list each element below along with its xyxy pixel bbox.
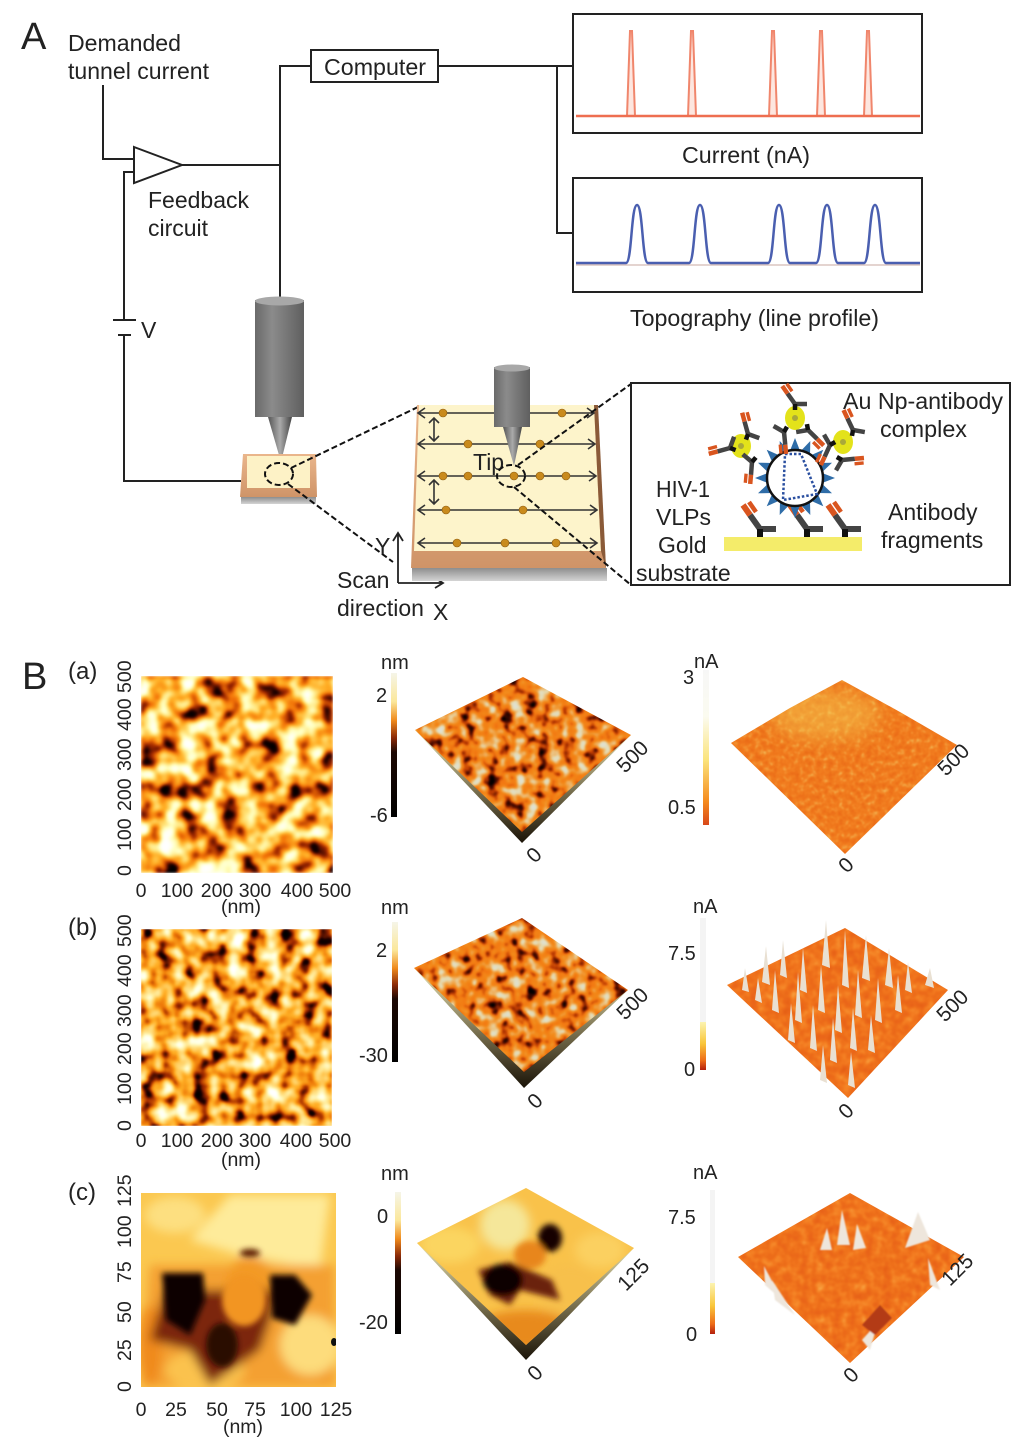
text: gold substrate: Gold [658, 532, 707, 558]
text: scan direction: direction [337, 595, 424, 621]
colorbar nm b: 2 [376, 940, 387, 962]
colorbar nA b: 0 [684, 1059, 695, 1081]
text: demanded tunnel current: Demanded [68, 30, 181, 56]
x-axis ticks c: 100 [280, 1399, 312, 1421]
colorbar nA a [668, 651, 719, 825]
icon: gold substrate bar [724, 537, 862, 551]
icon: HIV-1 VLP [755, 438, 835, 518]
3D topography b: 500 [612, 983, 653, 1025]
colorbar nA a: nA [694, 651, 719, 673]
3D topography c: 125 [613, 1254, 654, 1296]
3D current c with spikes [733, 1188, 978, 1388]
colorbar nA b: nA [693, 896, 718, 918]
x-axis ticks b [136, 1130, 351, 1171]
colorbar nm c: 0 [377, 1206, 388, 1228]
text: gold substrate: substrate [636, 560, 731, 586]
y-axis ticks c [114, 1174, 136, 1392]
text: Au Np-antibody complex: Au Np-antibody [843, 388, 1003, 414]
x-axis ticks c: (nm) [223, 1416, 263, 1438]
colorbar nm a: -6 [370, 805, 388, 827]
y-axis ticks b: 500 [114, 914, 136, 947]
y-axis ticks c: 50 [114, 1301, 136, 1323]
x-axis ticks a: 200 [201, 880, 233, 902]
icon: gold nanoparticles with antibodies [707, 384, 868, 486]
x-axis ticks b: 0 [136, 1130, 147, 1152]
text: Au Np-antibody complex [843, 388, 1003, 442]
y-axis ticks a [114, 660, 136, 876]
colorbar nA c: nA [693, 1162, 718, 1184]
x-axis ticks a: (nm) [221, 896, 261, 918]
label (a): (a) [68, 658, 97, 685]
y-axis ticks b: 200 [114, 1032, 136, 1065]
row c [68, 1162, 978, 1438]
colorbar nA c: 7.5 [668, 1207, 696, 1229]
y-axis ticks c: 100 [114, 1215, 136, 1248]
text: HIV-1 VLPs [656, 476, 711, 530]
x-axis ticks b: 300 [239, 1130, 271, 1152]
box: computer [311, 50, 438, 82]
y-axis ticks b: 400 [114, 954, 136, 987]
y-axis ticks b: 300 [114, 994, 136, 1027]
colorbar nm c: nm [381, 1163, 409, 1185]
chart: topography line profile [573, 178, 922, 292]
label B: B [22, 656, 47, 698]
x-axis ticks c: 75 [244, 1399, 266, 1421]
text: tip: Tip [473, 449, 504, 475]
3D topography b [410, 915, 653, 1114]
colorbar nm a: nm [381, 652, 409, 674]
text: topography label: Topography (line profile) [630, 305, 879, 331]
text: demanded tunnel current: tunnel current [68, 58, 210, 84]
text: antibody fragments: Antibody [888, 499, 978, 525]
dashed zoom lines to inset [497, 384, 631, 585]
x-axis ticks c: 25 [165, 1399, 187, 1421]
heatmap: 2D topography a [141, 676, 333, 873]
icon: voltage source [113, 320, 136, 335]
box: computer: Computer [324, 54, 426, 80]
panel: inset virus capture [631, 383, 1010, 586]
text: X: X [433, 599, 448, 625]
y-axis ticks a: 400 [114, 698, 136, 731]
x-axis ticks c: 50 [206, 1399, 228, 1421]
icon: surface antibodies [743, 502, 861, 537]
x-axis ticks a: 500 [319, 880, 351, 902]
colorbar nA b: 7.5 [668, 943, 696, 965]
text: feedback circuit: Feedback [148, 187, 250, 213]
y-axis ticks c: 125 [114, 1174, 136, 1207]
heatmap: 2D topography b [141, 929, 332, 1126]
x-axis ticks b: 100 [161, 1130, 193, 1152]
text: antibody fragments: fragments [881, 527, 983, 553]
y-axis ticks a: 0 [114, 865, 136, 876]
x-axis ticks a: 400 [281, 880, 313, 902]
text: feedback circuit [148, 187, 250, 241]
x-axis ticks a: 300 [239, 880, 271, 902]
x-axis ticks b: 400 [280, 1130, 312, 1152]
colorbar nA a: 3 [683, 667, 694, 689]
colorbar nm b: -30 [359, 1045, 388, 1067]
chart: current trace [573, 14, 922, 133]
label (b): (b) [68, 914, 97, 941]
icon: STM tip large [255, 296, 304, 462]
text: HIV-1 VLPs: HIV-1 [656, 476, 710, 502]
icon: feedback amplifier triangle [134, 147, 182, 183]
colorbar nA b [668, 896, 718, 1081]
heatmap: 2D topography c [138, 1193, 340, 1390]
x-axis ticks a: 100 [161, 880, 193, 902]
text: scan direction [337, 567, 424, 621]
3D topography c [412, 1185, 654, 1386]
sample stage enlarged [411, 405, 607, 581]
icon: STM tip small [494, 364, 530, 466]
y-axis ticks a: 200 [114, 778, 136, 811]
y-axis ticks c: 75 [114, 1261, 136, 1283]
row a [68, 651, 974, 918]
y-axis ticks c: 25 [114, 1339, 136, 1361]
y-axis ticks b: 0 [114, 1120, 136, 1131]
x-axis ticks b: (nm) [221, 1149, 261, 1171]
colorbar nm b [359, 897, 409, 1067]
3D current b with spikes [722, 920, 973, 1124]
3D current c with spikes: 0 [839, 1363, 864, 1388]
3D current b with spikes: 500 [932, 985, 973, 1027]
text: V: V [141, 317, 157, 343]
colorbar nm c [359, 1163, 409, 1334]
x-axis ticks b: 200 [201, 1130, 233, 1152]
text: feedback circuit: circuit [148, 215, 209, 241]
colorbar nm c: -20 [359, 1312, 388, 1334]
colorbar nm a: 2 [376, 685, 387, 707]
panel B: AFM and STM images [22, 651, 978, 1438]
3D topography a: 0 [522, 843, 547, 868]
colorbar nm a [370, 652, 409, 827]
row b [68, 896, 973, 1171]
x-axis ticks c: 0 [136, 1399, 147, 1421]
dashed zoom lines from small sample [265, 407, 418, 562]
text: Y: Y [375, 533, 390, 559]
x-axis ticks c [136, 1399, 352, 1438]
text: antibody fragments [881, 499, 983, 553]
3D current c with spikes: 125 [937, 1249, 978, 1291]
3D topography a: 500 [612, 736, 653, 778]
x-axis ticks b: 500 [319, 1130, 351, 1152]
y-axis ticks b [114, 914, 136, 1131]
y-axis ticks a: 500 [114, 660, 136, 693]
y-axis ticks c: 0 [114, 1381, 136, 1392]
3D current a [725, 675, 974, 878]
colorbar nA a: 0.5 [668, 797, 696, 819]
icon: XY axes [393, 533, 443, 588]
3D topography c: 0 [523, 1361, 548, 1386]
nanoparticle beads [439, 409, 570, 547]
colorbar nA c: 0 [686, 1324, 697, 1346]
x-axis ticks a: 0 [136, 880, 147, 902]
3D current a: 500 [933, 739, 974, 781]
colorbar nm b: nm [381, 897, 409, 919]
icon: small sample [240, 454, 317, 504]
3D current a: 0 [834, 853, 859, 878]
text: current label: Current (nA) [682, 142, 810, 168]
label A: A [21, 16, 47, 58]
text: scan direction: Scan [337, 567, 389, 593]
text: gold substrate [636, 532, 731, 586]
text: Au Np-antibody complex: complex [880, 416, 967, 442]
x-axis ticks c: 125 [320, 1399, 352, 1421]
panel A: STM schematic [21, 14, 1010, 625]
x-axis ticks a [136, 880, 351, 918]
scan lines [418, 408, 597, 548]
label (c): (c) [68, 1179, 96, 1206]
text: demanded tunnel current [68, 30, 210, 84]
circuit wires [103, 66, 572, 481]
text: HIV-1 VLPs: VLPs [656, 504, 711, 530]
colorbar nA c [668, 1162, 718, 1346]
y-axis ticks b: 100 [114, 1072, 136, 1105]
y-axis ticks a: 300 [114, 738, 136, 771]
3D topography b: 0 [523, 1089, 548, 1114]
3D topography a [410, 672, 653, 868]
3D current b with spikes: 0 [834, 1099, 859, 1124]
y-axis ticks a: 100 [114, 818, 136, 851]
